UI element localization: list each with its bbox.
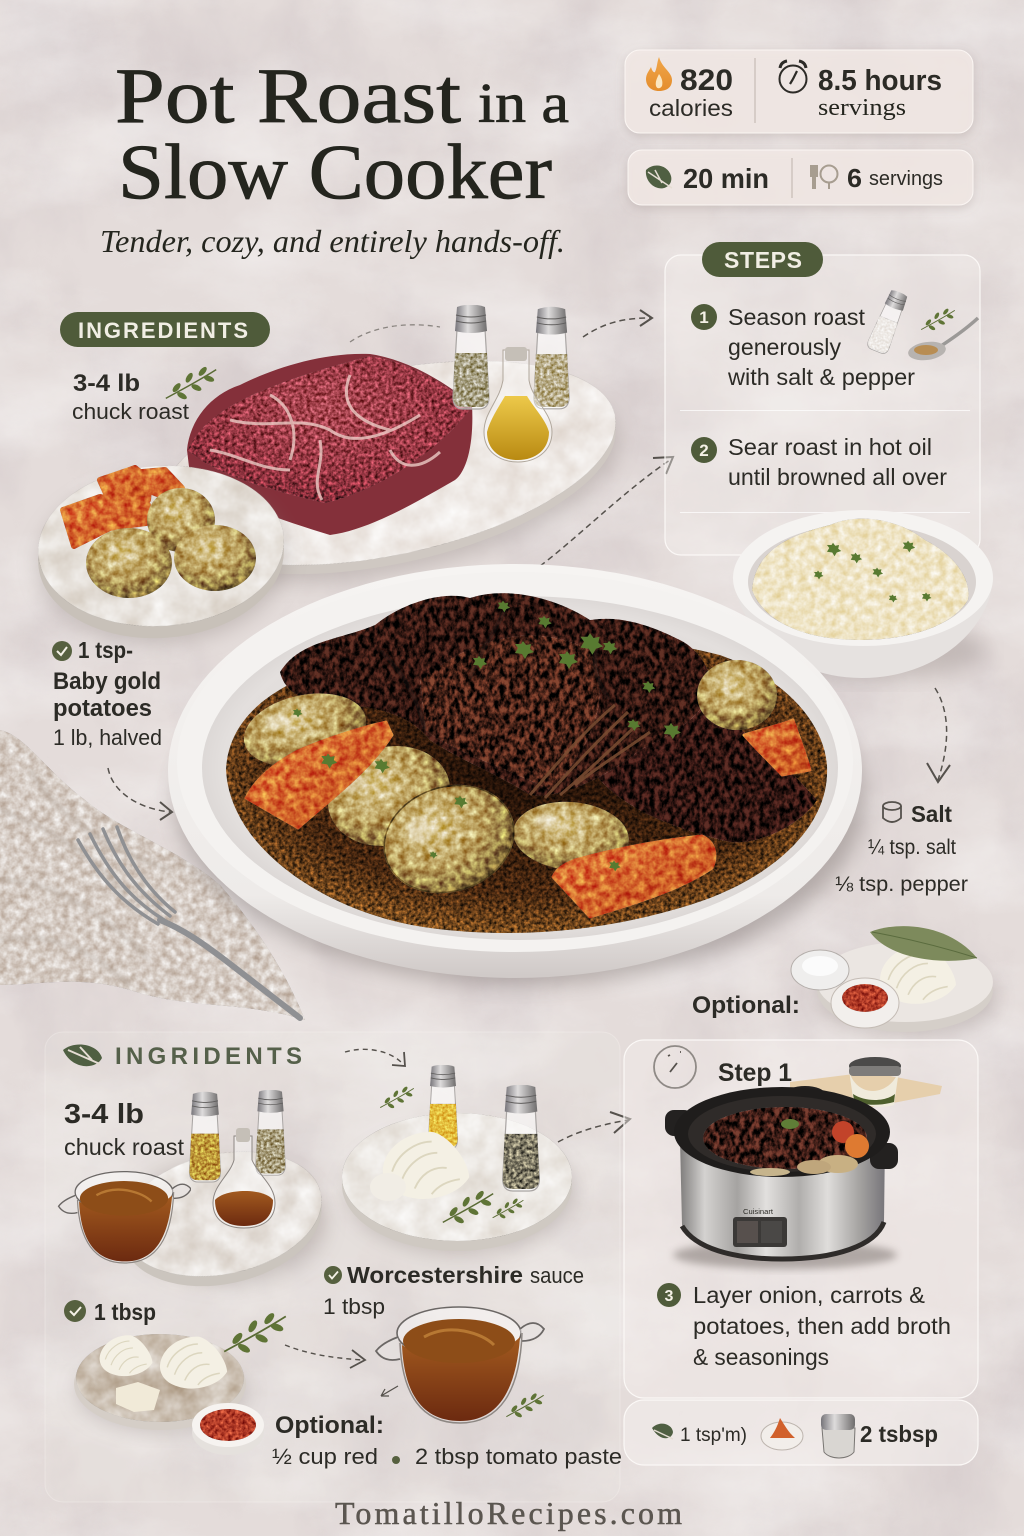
step 1 heading: Step 1 <box>718 1059 792 1087</box>
teaspoon amount: 1 tsp'm) <box>680 1425 747 1446</box>
cooker brand: Cuisinart <box>743 1209 773 1216</box>
tomato paste ramekin <box>192 1403 264 1455</box>
panel: prep time and servings <box>628 150 973 205</box>
optional ingredients text: 2 tbsp tomato paste <box>415 1444 622 1469</box>
icon: leaf <box>63 1044 102 1066</box>
panel: steps <box>665 242 980 555</box>
tablespoon amount: 2 tsbsp <box>860 1421 938 1447</box>
baby gold potatoes label: 1 lb, halved <box>53 725 162 750</box>
icon: leaf <box>652 1424 673 1439</box>
chuck roast label: 3-4 lb <box>73 370 140 397</box>
icon: alarm clock <box>780 61 806 92</box>
cutting board <box>790 1072 942 1118</box>
panel: lower ingredients <box>45 1032 622 1502</box>
step 3 text: potatoes, then add broth <box>693 1313 951 1339</box>
herbs on rice <box>814 541 932 603</box>
baby gold potatoes label <box>52 637 162 750</box>
step 1 text <box>727 304 915 390</box>
dashed arrow: onion board to cooker <box>558 1112 630 1142</box>
bowl of mashed cauliflower rice <box>733 510 993 680</box>
main plate of pot roast <box>168 564 865 985</box>
salt label: ¼ tsp. salt <box>868 836 956 859</box>
marble board: broth and oils <box>110 1134 334 1304</box>
steps badge <box>702 242 823 277</box>
small arrow to bowl <box>381 1386 398 1396</box>
dashed arrow: board to step 2 <box>540 457 673 566</box>
icon: small jar <box>821 1414 855 1458</box>
chuck roast label: 3-4 lb <box>64 1098 144 1129</box>
chuck roast label <box>72 370 189 424</box>
marble board: potatoes and carrots <box>31 458 293 653</box>
step 1 text: Season roast <box>728 304 866 330</box>
icon: leaf <box>646 165 672 188</box>
shredded beef <box>280 593 817 842</box>
onion pieces <box>100 1335 227 1412</box>
salt ramekin <box>791 950 849 990</box>
dashed arrow: onion plate to bowl <box>285 1345 365 1368</box>
icon: fork and plate <box>810 165 838 189</box>
raw baby potatoes <box>86 488 256 598</box>
icon: check <box>64 1300 86 1322</box>
dashed arrow: potatoes to plate <box>108 768 172 820</box>
steps badge: STEPS <box>724 247 802 273</box>
step 3 number: 3 <box>665 1288 674 1305</box>
glass bowl of broth <box>59 1172 191 1263</box>
step 1 number: 1 <box>699 308 709 327</box>
dashed arrow: heading to onion board <box>345 1049 405 1066</box>
glass bowl of worcestershire <box>376 1307 544 1423</box>
icon: spoon with herb <box>907 308 978 363</box>
hours stat: 8.5 hours <box>818 65 942 97</box>
step 2 text <box>728 434 947 490</box>
worcestershire label: 1 tbsp <box>323 1294 385 1319</box>
panel: slow cooker step <box>624 1040 978 1398</box>
step 3 text: Layer onion, carrots & <box>693 1282 925 1308</box>
optional label: Optional: <box>692 992 800 1019</box>
icon: check <box>52 641 72 661</box>
pepper shaker <box>503 1084 539 1191</box>
onion and bay leaf <box>870 926 977 1004</box>
calories stat <box>649 64 733 121</box>
marble plate: onion and butter <box>74 1334 248 1432</box>
title: Pot Roast <box>115 52 461 139</box>
icon: check <box>324 1266 342 1284</box>
tomato ramekin <box>831 978 899 1028</box>
chuck roast label: chuck roast <box>72 399 189 424</box>
hours stat: servings <box>818 95 906 121</box>
tablespoon label: 1 tbsp <box>94 1299 156 1325</box>
panel: calories and time stats <box>625 50 973 133</box>
salt label <box>835 801 968 896</box>
slow cooker <box>665 1086 898 1269</box>
salt label: Salt <box>911 801 952 827</box>
thyme sprigs <box>380 1086 523 1225</box>
title: Slow Cooker <box>118 128 552 215</box>
raw chuck roast <box>187 354 472 535</box>
dashed arrow: rice to salt <box>927 688 950 782</box>
optional ingredients text: ½ cup red <box>272 1444 378 1469</box>
onion and garlic <box>370 1132 469 1201</box>
panel: seasoning strip <box>624 1400 978 1465</box>
title <box>115 52 569 215</box>
jar <box>849 1057 901 1107</box>
cooker buttons <box>733 1217 787 1247</box>
worcestershire label <box>323 1262 584 1319</box>
footer website: TomatilloRecipes.com <box>335 1495 682 1531</box>
ingredients badge <box>60 312 270 347</box>
servings: 6 <box>847 163 862 193</box>
thyme by bowl <box>506 1392 544 1418</box>
marble board: roast <box>142 325 638 618</box>
icon: salt shaker <box>866 288 910 355</box>
step 2 text: until browned all over <box>728 464 947 490</box>
calories stat: calories <box>649 95 733 121</box>
chuck roast label <box>64 1098 185 1160</box>
parsley garnish <box>473 601 681 739</box>
oil bottle <box>484 347 552 462</box>
linen napkin <box>0 730 305 1020</box>
tablespoon label <box>64 1299 156 1325</box>
servings: servings <box>869 168 943 190</box>
prep time: 20 min <box>683 163 769 194</box>
shakers and cruet <box>189 1090 285 1228</box>
step 2 number: 2 <box>699 441 709 460</box>
calories stat: 820 <box>680 64 733 97</box>
title: in a <box>478 73 569 135</box>
step 1 number <box>691 304 717 330</box>
step 1 text: generously <box>728 334 841 360</box>
optional ingredients plate <box>791 926 996 1034</box>
step 2 text: Sear roast in hot oil <box>728 434 932 460</box>
worcestershire label: Worcestershire <box>347 1262 523 1288</box>
step 1 text: with salt & pepper <box>727 364 915 390</box>
step 3 text <box>693 1282 951 1370</box>
dashed arrow: shakers to steps <box>583 310 652 337</box>
pepper and herb shakers <box>453 304 569 409</box>
optional ingredients text: Optional: <box>275 1412 384 1439</box>
carrots in gravy <box>246 720 810 917</box>
ingredients badge: INGREDIENTS <box>78 318 248 343</box>
hours stat <box>818 65 942 121</box>
chuck roast label: chuck roast <box>64 1134 185 1160</box>
step 3 number <box>657 1283 681 1307</box>
icon: salt cup <box>883 802 901 822</box>
icon: spice bowl <box>761 1418 803 1450</box>
step 2 number <box>691 437 717 463</box>
marble board: onion and shakers <box>342 1113 574 1254</box>
step 3 text: & seasonings <box>693 1344 829 1370</box>
subtitle: Tender, cozy, and entirely hands-off. <box>100 223 565 259</box>
optional ingredients text <box>272 1412 622 1469</box>
gravy <box>226 633 827 933</box>
icon: clock <box>654 1046 696 1088</box>
icon: herb sprig by roast <box>166 366 216 401</box>
potatoes in gravy <box>237 660 777 909</box>
baby gold potatoes label: Baby gold <box>53 668 161 695</box>
lower ingredients heading: INGRIDENTS <box>115 1043 302 1070</box>
dashed arrow: roast to shakers <box>350 325 440 342</box>
fork <box>78 827 300 1018</box>
salt label: ⅛ tsp. pepper <box>835 873 968 896</box>
baby gold potatoes label: 1 tsp- <box>78 637 133 663</box>
raw carrots <box>63 468 182 546</box>
oil shaker <box>428 1065 458 1149</box>
baby gold potatoes label: potatoes <box>53 695 152 722</box>
servings <box>847 163 943 193</box>
thyme sprig <box>224 1311 286 1354</box>
icon: flame <box>646 57 672 91</box>
worcestershire label: sauce <box>530 1263 584 1288</box>
